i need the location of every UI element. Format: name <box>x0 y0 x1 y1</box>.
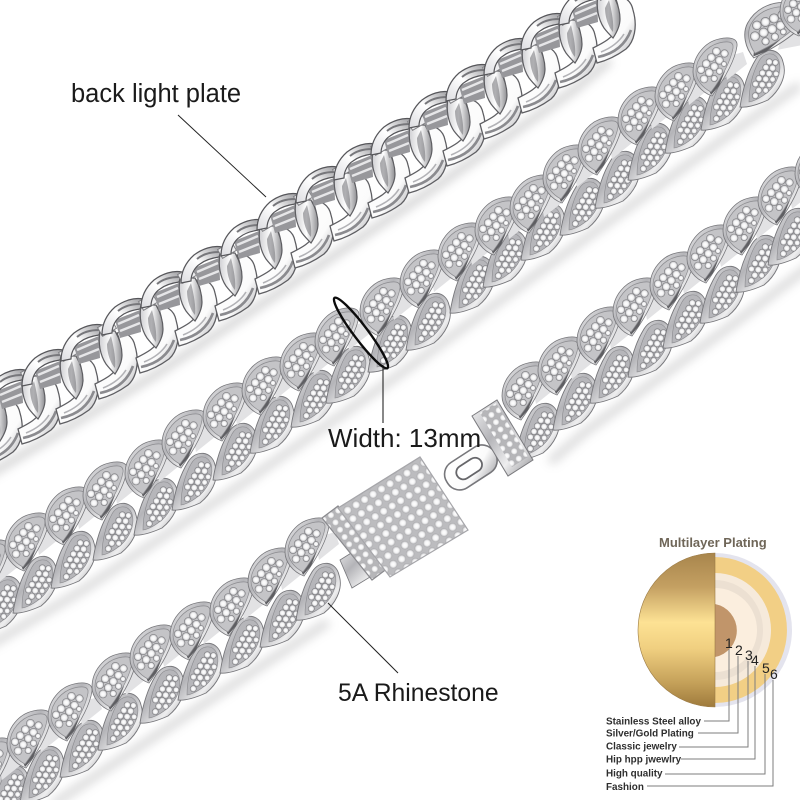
label: Width: 13mm <box>328 423 481 453</box>
plating title: Multilayer Plating <box>659 535 767 550</box>
layer labels: Silver/Gold Plating <box>606 728 694 740</box>
chain 1 shadow <box>0 60 610 480</box>
layer numbers <box>725 635 778 682</box>
chain 3 lower leaves <box>0 563 340 800</box>
label: 5A Rhinestone <box>338 680 499 707</box>
plating rings, right half <box>715 553 792 707</box>
annotation: rhinestone <box>328 603 499 707</box>
layer numbers: 3 <box>745 647 753 663</box>
layer labels: High quality <box>606 768 663 780</box>
layer labels: Hip hpp jwewlry <box>606 754 682 766</box>
chain 2 lower leaves <box>0 50 784 633</box>
leader line <box>382 365 384 423</box>
layer labels: Classic jewelry <box>606 742 677 752</box>
annotation: width <box>328 294 481 453</box>
clasp stone plate <box>338 457 468 577</box>
clasp bridge link <box>340 540 388 588</box>
chain 2 upper leaves <box>0 0 800 598</box>
layer numbers: 1 <box>725 635 733 651</box>
layer numbers: 4 <box>751 652 759 668</box>
chain: polished back plate <box>0 0 635 481</box>
layer numbers: 5 <box>762 660 770 676</box>
chain: rhinestone front strand, upper segment <box>502 140 800 462</box>
layer labels <box>606 716 701 793</box>
clasp: square stone plate <box>322 457 468 588</box>
label: back light plate <box>71 80 241 108</box>
leader line <box>328 603 398 673</box>
layer numbers: 6 <box>770 666 778 682</box>
chain: rhinestone front strand, lower segment <box>0 518 340 800</box>
width ellipse <box>329 294 393 372</box>
chain 3 lower shadow <box>52 622 328 800</box>
stone bar <box>472 400 533 476</box>
annotation: back light plate <box>71 80 266 197</box>
leader line <box>178 115 266 197</box>
chain 3 upper shadow <box>550 262 800 462</box>
chain 3 upper leaves <box>0 518 339 796</box>
chain 2 shadow <box>0 85 800 645</box>
layer numbers: 2 <box>735 642 743 658</box>
clasp: loop tab and stone bar <box>439 400 533 495</box>
panel: multilayer plating <box>606 535 792 793</box>
clasp stone bar <box>322 506 388 580</box>
plating sphere, left half <box>638 553 715 707</box>
chain 3 upper segment lower leaves <box>515 208 800 460</box>
leader lines <box>647 649 773 786</box>
loop tab <box>439 440 502 495</box>
layer labels: Stainless Steel alloy <box>606 716 701 728</box>
chain 1 polished links <box>0 0 635 481</box>
layer labels: Fashion <box>606 782 644 793</box>
chain 3 upper segment upper leaves <box>502 140 800 420</box>
